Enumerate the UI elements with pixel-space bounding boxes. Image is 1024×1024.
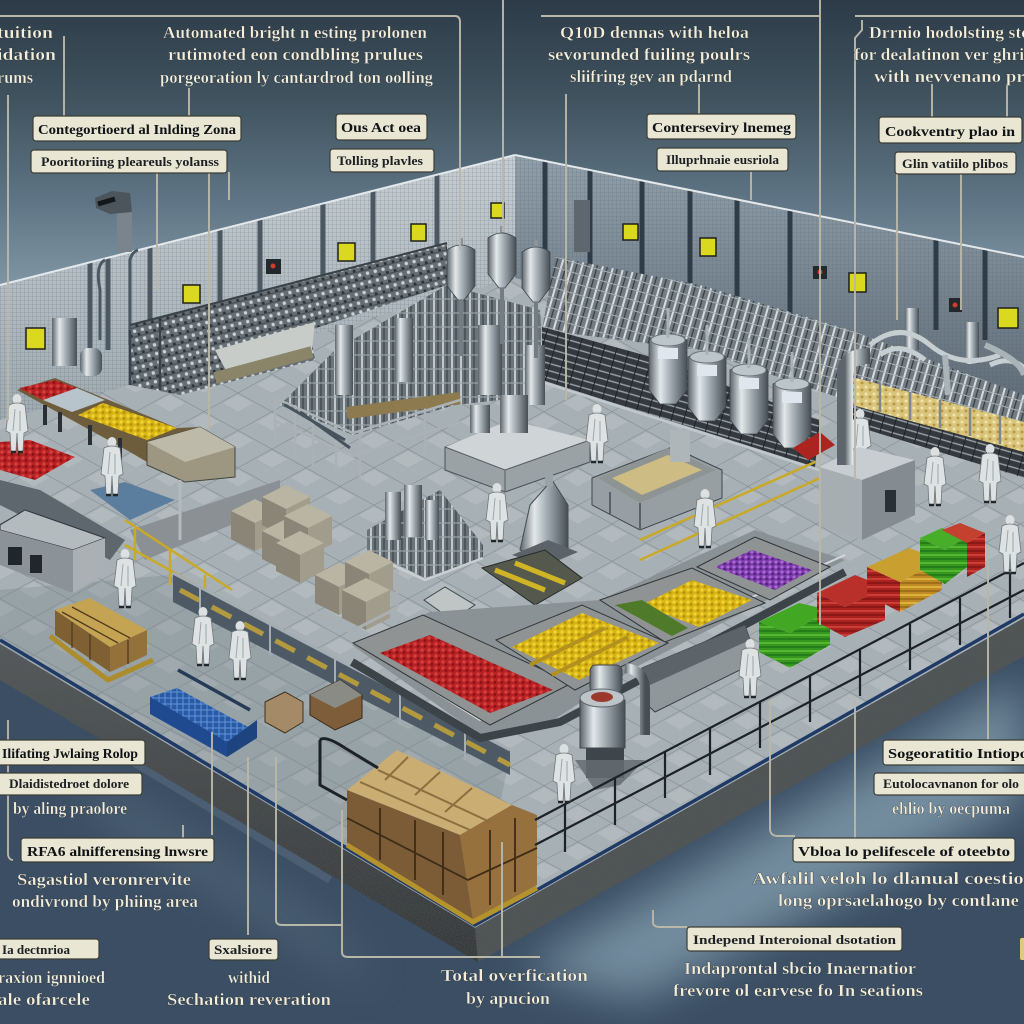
small wall tanks bbox=[52, 318, 102, 376]
label: distributed: Dlaidistedroet dolore bbox=[9, 777, 129, 791]
label: RFA6 bbox=[21, 838, 214, 862]
heading: automated production bbox=[160, 23, 433, 87]
four steel tanks bbox=[649, 308, 811, 448]
text: section bbox=[167, 968, 332, 1009]
label: segregation right: Sogeoratitio Intiopo bbox=[888, 747, 1024, 762]
heading: holding: for dealatinon ver ghrin bbox=[854, 45, 1024, 64]
text: ignored: raxion ignnioed bbox=[0, 968, 105, 987]
stainless mixer bbox=[575, 665, 645, 790]
label: illuminate: Illuprhnaie eusriola bbox=[666, 153, 780, 167]
label: value bbox=[793, 838, 1015, 862]
heading: QC demand: Q10D dennas with heloa bbox=[560, 23, 750, 42]
label: zone bbox=[33, 116, 241, 141]
heading: automated production: rutimoted eon condbling prulues bbox=[168, 45, 423, 64]
yellow tray front bbox=[496, 605, 668, 690]
text: independent detail bbox=[673, 959, 923, 1000]
colour product stacks bbox=[759, 523, 985, 668]
heading: holding bbox=[854, 23, 1024, 86]
text: section: Sechation reveration bbox=[167, 990, 332, 1009]
label: tolling: Tolling plavles bbox=[337, 154, 423, 168]
heading: holding: Drrnio hodolsting stei bbox=[869, 23, 1024, 42]
grey carton stacks bbox=[231, 485, 397, 632]
label: distributed bbox=[0, 773, 142, 795]
label: glin bbox=[895, 152, 1016, 174]
metal crate bbox=[424, 587, 475, 620]
yellow safety rail bbox=[125, 462, 820, 605]
yellow tray back bbox=[600, 568, 765, 642]
label: zone: Contegortioerd al Inlding Zona bbox=[38, 123, 236, 138]
heading: QC demand bbox=[548, 23, 750, 86]
text: available bbox=[752, 869, 1024, 910]
dark floor mat bbox=[178, 670, 250, 710]
text: ignored: ale ofarcele bbox=[0, 990, 91, 1009]
right yellow conveyor bbox=[852, 345, 1024, 478]
text: ehlio: ehlio by oecpuma bbox=[892, 799, 1010, 818]
text: by aling: by aling praolore bbox=[13, 799, 127, 818]
red tray bbox=[353, 615, 572, 725]
label: lifting: Ilifating Jwlaing Rolop bbox=[2, 747, 138, 762]
purple tray bbox=[697, 537, 830, 600]
label: contemporary: Conterseviry lnemeg bbox=[652, 121, 791, 136]
back-left machinery rack bbox=[130, 243, 447, 395]
large pallet of boxes bbox=[347, 750, 537, 922]
factory floor bbox=[0, 278, 1024, 928]
label: polishing bbox=[31, 150, 227, 173]
label: contemporary bbox=[647, 114, 796, 139]
label: illuminate bbox=[657, 148, 788, 171]
pallet of boxes left bbox=[50, 598, 153, 680]
clipped label marker bbox=[1020, 938, 1024, 960]
platform railing bbox=[273, 397, 460, 480]
label: independent: Independ Interoional dsotation bbox=[693, 933, 896, 947]
label: segregation right bbox=[883, 740, 1024, 765]
red product tray by conveyor bbox=[793, 432, 835, 460]
long conveyor frame with trays bbox=[352, 530, 845, 738]
text: total verification bbox=[441, 966, 589, 1008]
text: independent detail: Indaprontal sbcio Inaernatior bbox=[684, 959, 916, 978]
silver oven unit bbox=[0, 510, 105, 593]
label: automation: Eutolocavnanon for olo bbox=[883, 777, 1019, 791]
text: total verification: Total overfication bbox=[441, 966, 589, 985]
slab trim bbox=[0, 614, 1024, 925]
label: lifting bbox=[0, 740, 145, 765]
text: section: withid bbox=[228, 968, 270, 987]
label: RFA6: RFA6 alnifferensing lnwsre bbox=[27, 845, 208, 860]
label: value: Vbloa lo pelifescele of oteebto bbox=[798, 845, 1010, 860]
concrete slab edge bbox=[0, 618, 1024, 962]
label: destination bbox=[0, 939, 99, 959]
label: glin: Glin vatiilo plibos bbox=[902, 157, 1008, 171]
label: independent bbox=[687, 927, 902, 951]
label: tolling bbox=[330, 149, 434, 172]
text: available: long oprsaelahogo by contlane n bbox=[778, 891, 1024, 910]
label: cookventry bbox=[879, 117, 1022, 143]
label: polishing: Pooritoriing pleareuls yolanss bbox=[41, 155, 219, 169]
blue product pallet bbox=[150, 688, 257, 757]
label: act area bbox=[336, 114, 427, 140]
left back wall bbox=[0, 155, 515, 420]
back-right machinery bbox=[542, 200, 1024, 470]
workers bbox=[6, 394, 1021, 802]
label: destination: Ia dectnrioa bbox=[2, 943, 71, 957]
steel rack machine bbox=[367, 485, 483, 580]
central steel table bbox=[445, 395, 590, 492]
text: ignored bbox=[0, 968, 105, 1009]
left back conveyors bbox=[0, 378, 280, 560]
text: total verification: by apucion bbox=[466, 989, 551, 1008]
heading: holding: with nevvenano pro bbox=[874, 67, 1024, 86]
exhaust machine box bbox=[819, 356, 915, 540]
text: segregation: Sagastiol veronrervite bbox=[17, 870, 191, 889]
label: act area: Ous Act oea bbox=[341, 121, 421, 136]
tray machine bbox=[592, 430, 722, 530]
yellow sorting rack bbox=[482, 550, 582, 605]
control console bbox=[642, 625, 750, 712]
heading: automated production: Automated bright n esting prolonen bbox=[163, 23, 428, 42]
right back wall bbox=[515, 155, 1024, 420]
floor crates bbox=[265, 680, 362, 733]
label: sxalsiore: Sxalsiore bbox=[214, 943, 273, 957]
text: segregation bbox=[12, 870, 199, 911]
low fence along walkway bbox=[173, 573, 510, 775]
label: cookventry: Cookventry plao in bbox=[885, 125, 1015, 140]
centre mixer machine bbox=[512, 472, 578, 566]
heading: automated production: porgeoration ly cantardrod ton oolling bbox=[160, 68, 433, 87]
central platform machinery bbox=[280, 285, 545, 435]
label: sxalsiore bbox=[209, 939, 278, 960]
text: available: Awfalil veloh lo dlanual coestioo bbox=[752, 869, 1024, 888]
front railing bbox=[320, 563, 1024, 852]
heading: QC demand: sevorunded fuiling poulrs bbox=[548, 45, 750, 64]
wall indicators bbox=[266, 217, 962, 312]
tall funnel tanks bbox=[447, 226, 550, 358]
camera on pole bbox=[95, 191, 138, 345]
heading: QC demand: sliifring gev an pdarnd bbox=[570, 67, 733, 86]
heading: left clipped bbox=[0, 23, 57, 87]
label: automation bbox=[874, 773, 1024, 795]
warning signs bbox=[26, 203, 1018, 349]
text: independent detail: frevore ol earvese fo In seations bbox=[673, 981, 923, 1000]
text: segregation: ondivrond by phiing area bbox=[12, 892, 199, 911]
